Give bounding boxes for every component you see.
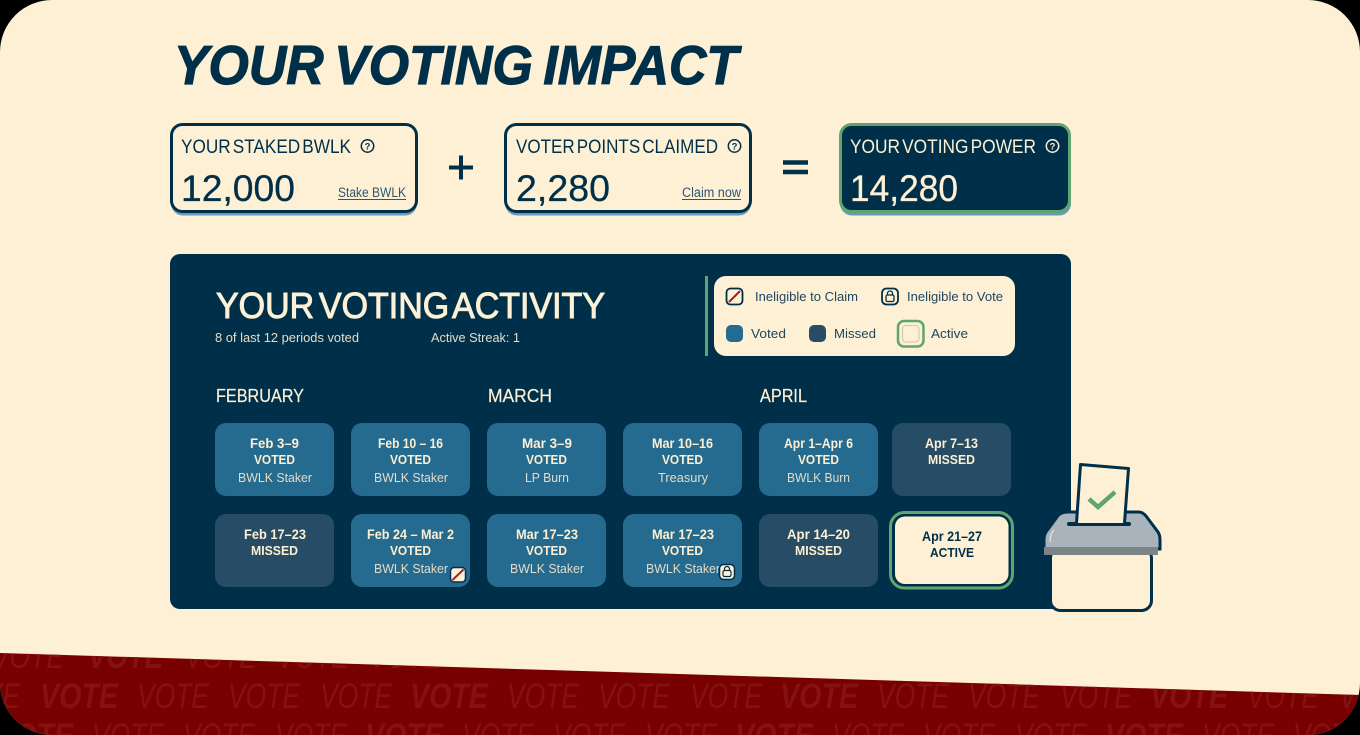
- red footer band with VOTE pattern: VOTE: [369, 637, 441, 676]
- red footer band with VOTE pattern: VOTE: [877, 677, 949, 716]
- tile: Apr 14-20: Apr 14–20: [787, 527, 850, 542]
- badge: ineligible to vote: [720, 564, 734, 580]
- red footer band with VOTE pattern: VOTE: [1060, 677, 1132, 716]
- tile: Mar 17-23 (LP): BWLK Staker: [510, 561, 585, 576]
- badge: ineligible to claim: [450, 568, 466, 582]
- card: your staked BWLK: Stake BWLK: [338, 185, 406, 200]
- tile: Feb 3-9: [215, 423, 334, 496]
- tile: Feb 17-23: [215, 514, 334, 587]
- tile: Mar 17-23 (locked): [623, 514, 742, 587]
- card: your staked BWLK: [171, 124, 417, 216]
- tile: Apr 7-13: MISSED: [928, 452, 975, 467]
- tile: Mar 10-16: [623, 423, 742, 496]
- tile: Apr 14-20: [759, 514, 878, 587]
- swatch: missed: [809, 325, 826, 342]
- tile: Feb 10-16: VOTED: [390, 452, 431, 467]
- tile: Apr 14-20: MISSED: [795, 543, 842, 558]
- month: February: FEBRUARY: [216, 385, 304, 406]
- panel: voting activity: [170, 254, 1071, 609]
- ballot box body: [1050, 548, 1152, 610]
- tile: Apr 21-27 active: [890, 512, 1012, 588]
- tile: Mar 17-23 (LP): VOTED: [526, 543, 567, 558]
- red footer band with VOTE pattern: VOTE: [185, 637, 257, 676]
- red footer band with VOTE pattern: VOTE: [968, 677, 1040, 716]
- tile: Feb 24-Mar 2: [351, 514, 470, 587]
- card: voter points claimed: VOTER POINTS CLAIMED: [516, 137, 718, 158]
- legend: Voted: [751, 326, 786, 341]
- tile: Feb 24-Mar 2: BWLK Staker: [374, 561, 449, 576]
- tile: Apr 1-Apr 6: Apr 1–Apr 6: [784, 436, 853, 451]
- red footer band with VOTE pattern: VOTE: [410, 677, 489, 716]
- tile: Apr 21-27 active: ACTIVE: [930, 545, 974, 560]
- title: YOUR VOTING IMPACT: [174, 34, 742, 96]
- red footer band with VOTE pattern: VOTE: [228, 677, 300, 716]
- card: your voting power: 14,280: [850, 168, 958, 209]
- card: your voting power: YOUR VOTING POWER: [850, 137, 1036, 158]
- tile: Mar 17-23 (LP): [487, 514, 606, 587]
- red footer band with VOTE pattern: VOTE: [137, 677, 209, 716]
- card: voter points claimed: ?: [732, 142, 738, 152]
- red footer band with VOTE pattern: VOTE: [458, 637, 534, 676]
- card: your staked BWLK: ?: [365, 142, 371, 152]
- month: April: APRIL: [760, 385, 807, 406]
- tile: Feb 3-9: BWLK Staker: [238, 470, 313, 485]
- plus sign: [449, 156, 473, 180]
- red footer band with VOTE pattern: [0, 653, 1358, 735]
- tile: Apr 1-Apr 6: BWLK Burn: [787, 470, 850, 485]
- legend: Active: [931, 326, 968, 341]
- equals sign: [783, 162, 808, 172]
- red footer band with VOTE pattern: VOTE: [690, 677, 762, 716]
- red footer band with VOTE pattern: VOTE: [1247, 677, 1319, 716]
- tile: Mar 17-23 (locked): VOTED: [662, 543, 703, 558]
- tile: Apr 7-13: Apr 7–13: [925, 436, 978, 451]
- card: voter points claimed: [505, 124, 751, 216]
- check mark: [1089, 492, 1115, 507]
- tile: Apr 21-27 active: Apr 21–27: [922, 529, 982, 544]
- tile: Mar 17-23 (locked): BWLK Staker: [646, 561, 721, 576]
- legend divider: [705, 276, 708, 356]
- ballot paper: [1076, 464, 1128, 523]
- tile: Mar 3-9: Mar 3–9: [522, 436, 572, 451]
- card: voter points claimed: 2,280: [516, 168, 610, 209]
- red footer band with VOTE pattern: VOTE: [88, 637, 164, 676]
- tile: Feb 10-16: [351, 423, 470, 496]
- tile: Mar 10-16: Treasury: [658, 470, 708, 485]
- swatch: active: [898, 321, 924, 346]
- tile: Feb 24-Mar 2: Feb 24 – Mar 2: [367, 527, 454, 542]
- tile: Apr 1-Apr 6: [759, 423, 878, 496]
- tile: Feb 3-9: VOTED: [254, 452, 295, 467]
- icon: ineligible to claim: [726, 288, 742, 304]
- active streak: Active Streak: 1: [431, 330, 520, 345]
- tile: Feb 24-Mar 2: VOTED: [390, 543, 431, 558]
- periods voted: 8 of last 12 periods voted: [215, 330, 359, 345]
- tile: Mar 3-9: LP Burn: [525, 470, 569, 485]
- tile: Mar 3-9: VOTED: [526, 452, 567, 467]
- red footer band with VOTE pattern: VOTE: [780, 677, 859, 716]
- red footer band with VOTE pattern: VOTE: [40, 677, 119, 716]
- tile: Feb 17-23: MISSED: [251, 543, 298, 558]
- card: your staked BWLK: 12,000: [181, 168, 295, 209]
- swatch: voted: [726, 325, 743, 342]
- icon: ineligible to vote: [882, 288, 898, 304]
- legend: Missed: [834, 326, 876, 341]
- tile: Mar 3-9: [487, 423, 606, 496]
- tile: Feb 3-9: Feb 3–9: [250, 436, 299, 451]
- card: your voting power: ?: [1050, 142, 1056, 152]
- ballot slot: [1069, 522, 1129, 526]
- tile: Feb 17-23: Feb 17–23: [244, 527, 306, 542]
- tile: Apr 1-Apr 6: VOTED: [798, 452, 839, 467]
- legend: Ineligible to Claim: [755, 289, 858, 304]
- tile: Feb 10-16: BWLK Staker: [374, 470, 449, 485]
- ballot box lid: [1044, 512, 1160, 555]
- tile: Feb 10-16: Feb 10 – 16: [378, 436, 443, 451]
- card: your staked BWLK: YOUR STAKED BWLK: [181, 137, 351, 158]
- red footer band with VOTE pattern: VOTE: [598, 677, 670, 716]
- red footer band with VOTE pattern: VOTE: [507, 677, 579, 716]
- card: your voting power: [840, 124, 1071, 216]
- legend: Ineligible to Vote: [907, 289, 1003, 304]
- icon: ballot box: [1044, 464, 1160, 610]
- tile: Apr 7-13: [892, 423, 1011, 496]
- tile: Mar 17-23 (LP): Mar 17–23: [516, 527, 578, 542]
- card: voter points claimed: Claim now: [682, 185, 741, 200]
- tile: Mar 17-23 (locked): Mar 17–23: [652, 527, 714, 542]
- month: March: MARCH: [488, 385, 552, 406]
- red footer band with VOTE pattern: VOTE: [320, 677, 392, 716]
- legend: [714, 276, 1015, 356]
- tile: Mar 10-16: VOTED: [662, 452, 703, 467]
- red footer band with VOTE pattern: VOTE: [277, 637, 349, 676]
- tile: Mar 10-16: Mar 10–16: [652, 436, 713, 451]
- panel heading: YOUR VOTING ACTIVITY: [216, 285, 605, 326]
- red footer band with VOTE pattern: VOTE: [1150, 677, 1229, 716]
